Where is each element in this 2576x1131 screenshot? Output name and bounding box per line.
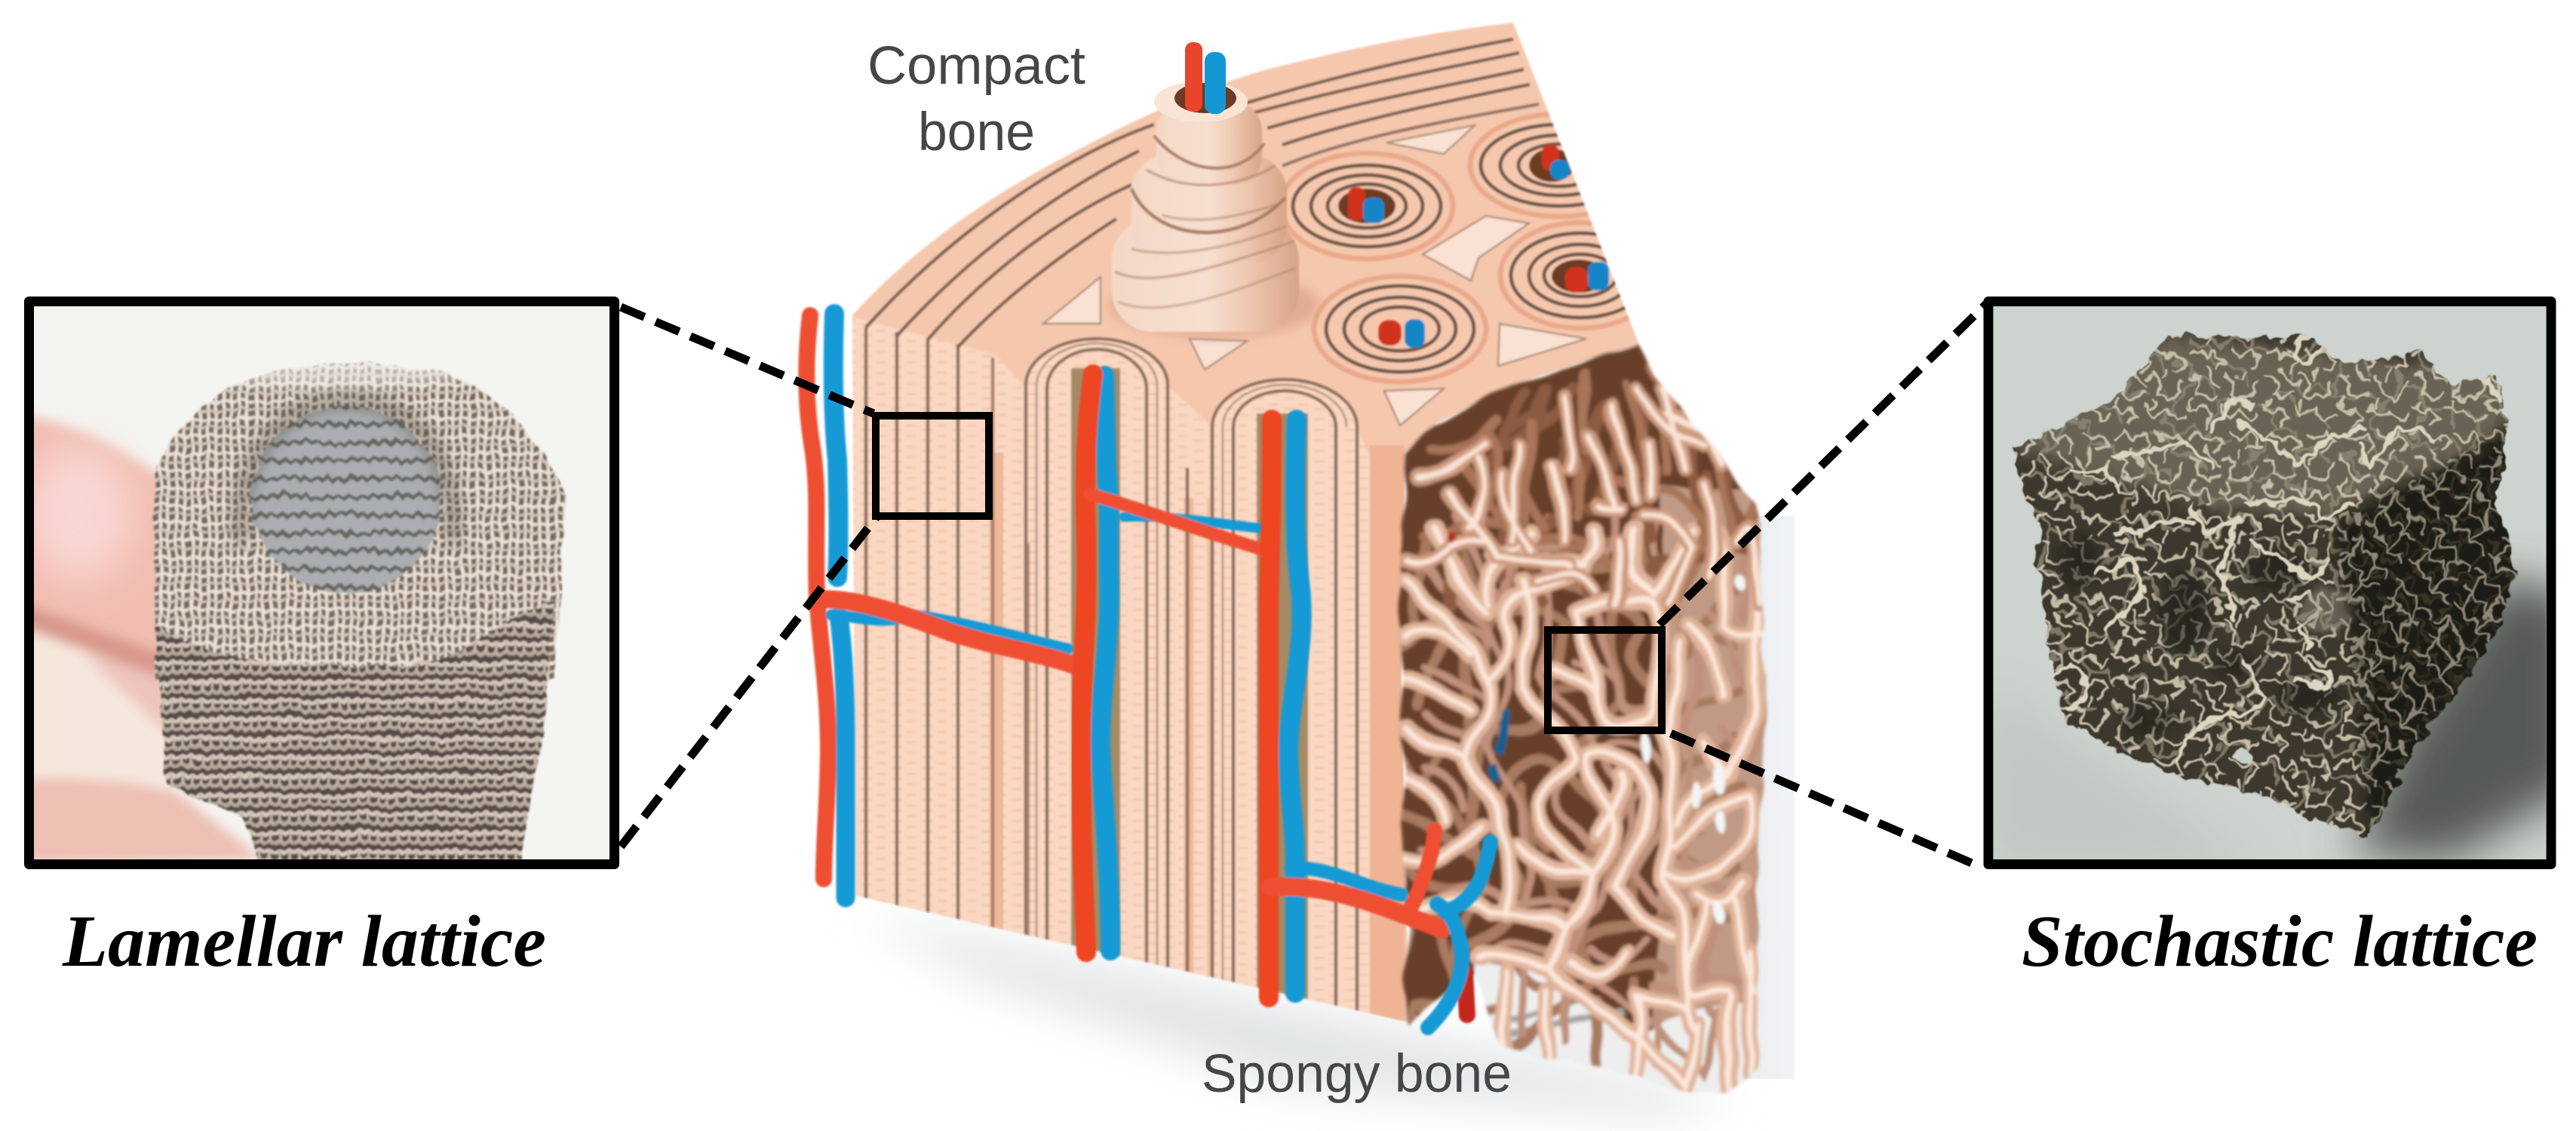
osteon 1 [1281, 153, 1453, 259]
frame [29, 302, 614, 865]
cast shadow [2353, 573, 2576, 860]
red vessel [1269, 420, 1272, 997]
red vessel [1081, 374, 1093, 952]
back struts [1377, 517, 1785, 1105]
photo content: finger holding lamellar lattice [23, 302, 615, 864]
dashed connectors: compact bone to lamellar lattice [621, 307, 877, 847]
osteon 3 [1497, 219, 1629, 332]
backdrop behind spongy bone [1690, 516, 1795, 1079]
cone middle layer [1131, 155, 1287, 264]
right face shade [2335, 428, 2528, 851]
callout square on compact bone [876, 416, 989, 516]
blue branch [1428, 842, 1491, 1028]
highlighted struts [2053, 337, 2498, 760]
lattice upper section [154, 363, 565, 679]
under-layer struts [1996, 322, 2533, 851]
osteon 2 [1466, 112, 1589, 220]
blue vessel [1288, 420, 1302, 993]
connecting red vessel [817, 599, 1082, 668]
open lower zone with legs [1473, 964, 1769, 1102]
red branch [1412, 830, 1435, 905]
protruding osteon cone [1109, 42, 1320, 337]
lattice inner well [251, 406, 441, 593]
top face brightening [2013, 337, 2504, 515]
heading: Lamellar lattice: Lamellar lattice [62, 901, 546, 982]
top surface [852, 23, 1640, 1022]
panel: stochastic lattice photo [1984, 297, 2576, 870]
lattice lower section [155, 600, 554, 864]
photo content: metal foam cube [1984, 297, 2576, 870]
growth rings [866, 39, 1539, 347]
pale holes near right edge [1641, 574, 1745, 927]
osteons with concentric rings [1281, 114, 1660, 382]
upper connecting blue vessel [1124, 517, 1260, 528]
heading: Stochastic lattice: Stochastic lattice [2022, 901, 2538, 982]
interstitial bone wedges [1043, 125, 1586, 426]
blue vessel [834, 314, 839, 577]
panel: lamellar lattice photo [23, 302, 615, 865]
label: Spongy bone: Spongy bone [1202, 1044, 1512, 1104]
bone shadow [860, 913, 1735, 1117]
label: Compact bone: bone [918, 103, 1035, 162]
label: Compact bone: Compact [867, 36, 1085, 96]
lower connecting red vessel [1270, 887, 1442, 930]
compact bone block [852, 23, 1660, 1056]
frame [1988, 302, 2551, 865]
middle vessel pair [1081, 374, 1262, 952]
connecting blue vessel [831, 615, 1067, 649]
front trabeculae [1404, 528, 1766, 1094]
dashed connectors: spongy bone to stochastic lattice [1660, 302, 1988, 863]
front surface with lamellae [852, 317, 1405, 1056]
cone swirl lines [1115, 136, 1296, 308]
right face struts [2335, 428, 2516, 837]
left vessel pair [806, 314, 1082, 898]
right vessel pair [1269, 420, 1491, 1028]
blue vessel [1101, 376, 1110, 951]
specular highlights [2300, 589, 2353, 632]
upper rods [1409, 389, 1760, 604]
callout square on spongy bone [1548, 630, 1662, 730]
hidden vessel inside spongy bone [1490, 709, 1507, 781]
spongy bone block [1377, 340, 1802, 1105]
cone lowest layer [1112, 219, 1299, 332]
cone vessels [1185, 42, 1202, 112]
cone top layer [1156, 102, 1262, 185]
well rim shading [241, 400, 453, 543]
dark cavities [2058, 533, 2344, 736]
label: Compact bone [867, 36, 1085, 162]
foam base [1996, 322, 2533, 851]
upper connecting red vessel [1090, 494, 1262, 549]
red vessel [806, 315, 828, 879]
main struts [1996, 322, 2533, 851]
lower connecting blue vessel [1291, 868, 1402, 895]
osteon 4 [1314, 276, 1486, 382]
